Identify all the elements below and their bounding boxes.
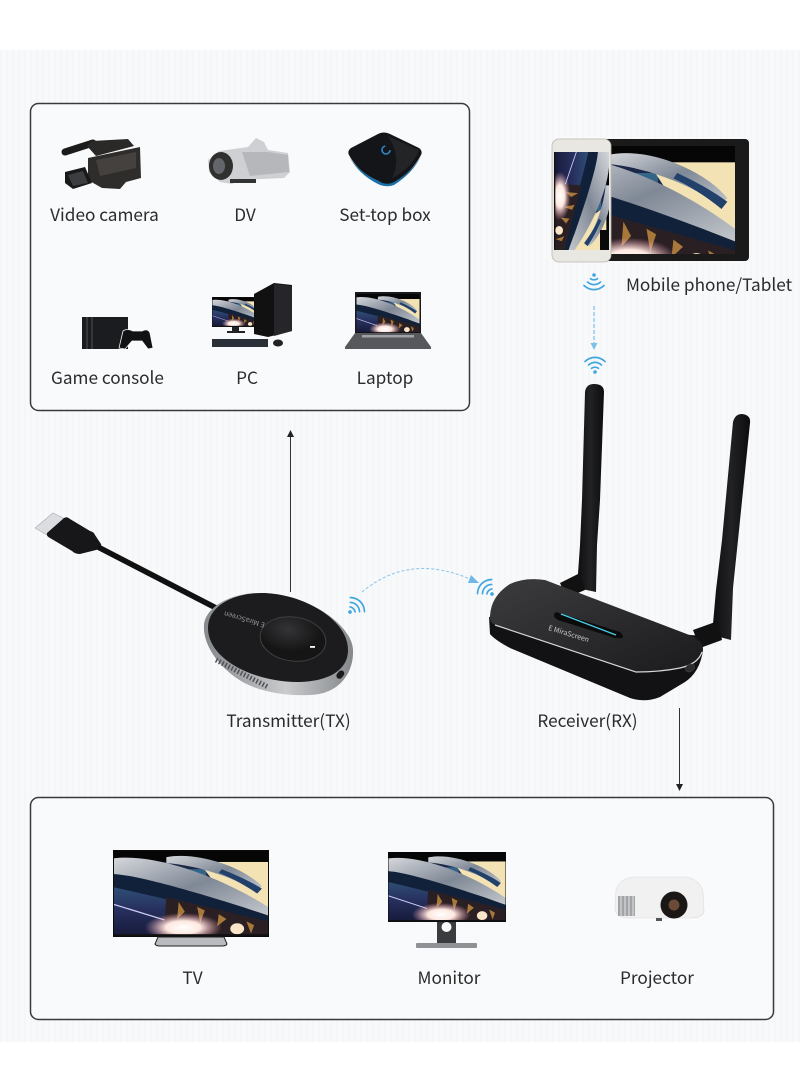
icon: wifi above receiver (585, 357, 605, 374)
label: mobile phone/tablet: Mobile phone/Tablet (626, 271, 793, 296)
icon: wifi under phone (584, 273, 604, 290)
icon: phone (550, 139, 614, 262)
label: transmitter: Transmitter(TX) (226, 707, 351, 732)
label: game console: Game console (51, 364, 164, 389)
icon: set-top box (348, 132, 422, 186)
label: projector: Projector (620, 964, 694, 989)
HDMI plug (35, 513, 101, 554)
cable (98, 547, 218, 609)
icon: tablet (543, 139, 749, 281)
label: DV: DV (234, 201, 256, 226)
label: TV: TV (182, 964, 203, 989)
label: receiver: Receiver(RX) (537, 707, 638, 732)
icon: TV (113, 850, 269, 946)
label: PC: PC (236, 364, 258, 389)
icon: DV camcorder (208, 138, 290, 184)
icon: monitor (388, 852, 506, 948)
antennas (560, 384, 750, 648)
panel: display devices (30, 798, 774, 1020)
arrow: phone to receiver (590, 306, 598, 350)
icon: PC (212, 283, 292, 347)
icon: wifi receiver (475, 577, 500, 602)
label: monitor: Monitor (418, 964, 481, 989)
icon: video camera (65, 139, 141, 189)
icon: wifi transmitter (342, 595, 367, 620)
panel: source devices (30, 104, 470, 410)
arrow: transmitter to sources (287, 430, 294, 592)
label: set-top box: Set-top box (339, 201, 431, 226)
receiver device (489, 384, 750, 732)
receiver body (489, 579, 703, 700)
receiver body: E MiraScreen (547, 623, 590, 645)
label: video camera: Video camera (50, 201, 159, 226)
icon: laptop (345, 292, 431, 349)
transmitter body (204, 593, 353, 695)
transmitter device (35, 513, 353, 732)
icon: projector (615, 877, 704, 921)
label: laptop: Laptop (357, 364, 413, 389)
arrow: receiver to displays (676, 708, 683, 791)
arrow: transmitter to receiver (362, 568, 479, 592)
icon: game console (82, 317, 153, 349)
transmitter body: E MiraScreen (223, 608, 266, 630)
